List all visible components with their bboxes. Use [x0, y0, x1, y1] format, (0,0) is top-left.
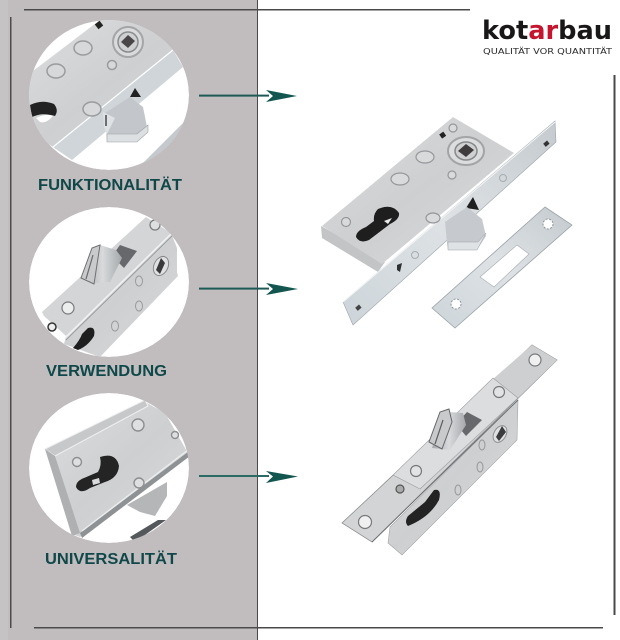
fixing screw	[48, 323, 56, 331]
hook latch	[456, 412, 482, 436]
keyhole	[356, 207, 399, 241]
faceplate	[343, 121, 556, 325]
keyhole	[73, 328, 94, 350]
dimples	[455, 440, 485, 495]
dimples	[47, 41, 116, 116]
keyhole	[30, 102, 57, 117]
arrow 1	[199, 90, 297, 102]
dimples	[112, 276, 142, 331]
strike plate	[144, 123, 183, 162]
main lock front view	[321, 117, 556, 325]
arrow 2	[199, 283, 298, 295]
hook behind	[127, 482, 167, 516]
keyhole	[76, 456, 119, 491]
circle: universality detail	[29, 393, 190, 545]
strike plate	[432, 207, 572, 328]
lock body	[29, 20, 172, 147]
lock side edge	[321, 226, 385, 272]
body	[46, 403, 189, 537]
screw holes	[543, 219, 553, 229]
faceplate	[342, 345, 557, 542]
raised plate	[393, 378, 518, 489]
faceplate holes	[397, 263, 402, 272]
left edge	[45, 449, 80, 536]
tagline: QUALITÄT VOR QUANTITÄT	[483, 47, 613, 56]
faceplate	[42, 217, 171, 336]
label: UNIVERSALITÄT	[45, 551, 178, 568]
label: FUNKTIONALITÄT	[38, 177, 183, 194]
grey left panel	[0, 0, 257, 640]
circle: functionality detail	[29, 20, 190, 170]
latch	[130, 88, 141, 97]
screw hole	[62, 302, 74, 314]
rosette	[113, 27, 143, 57]
screw holes and dimples	[342, 124, 457, 226]
body	[64, 233, 178, 357]
lock body	[322, 117, 514, 264]
body	[388, 400, 518, 555]
bottom edge	[80, 452, 190, 538]
circle: usage detail	[29, 207, 189, 357]
keyhole	[406, 490, 440, 526]
square socket	[152, 256, 170, 276]
arrow 3	[199, 471, 298, 483]
square hole	[95, 21, 103, 29]
wordmark: kotarbau	[482, 16, 612, 46]
hook latch	[466, 197, 479, 210]
second lock side view	[342, 345, 557, 555]
rosette	[448, 137, 484, 165]
logo	[482, 16, 613, 56]
screw holes	[529, 354, 541, 366]
faceplate	[53, 50, 183, 160]
top edge	[45, 400, 148, 456]
label: VERWENDUNG	[46, 363, 167, 380]
square socket	[490, 423, 510, 445]
slot	[480, 245, 529, 287]
latch hook	[116, 245, 137, 268]
dimples	[72, 419, 178, 488]
